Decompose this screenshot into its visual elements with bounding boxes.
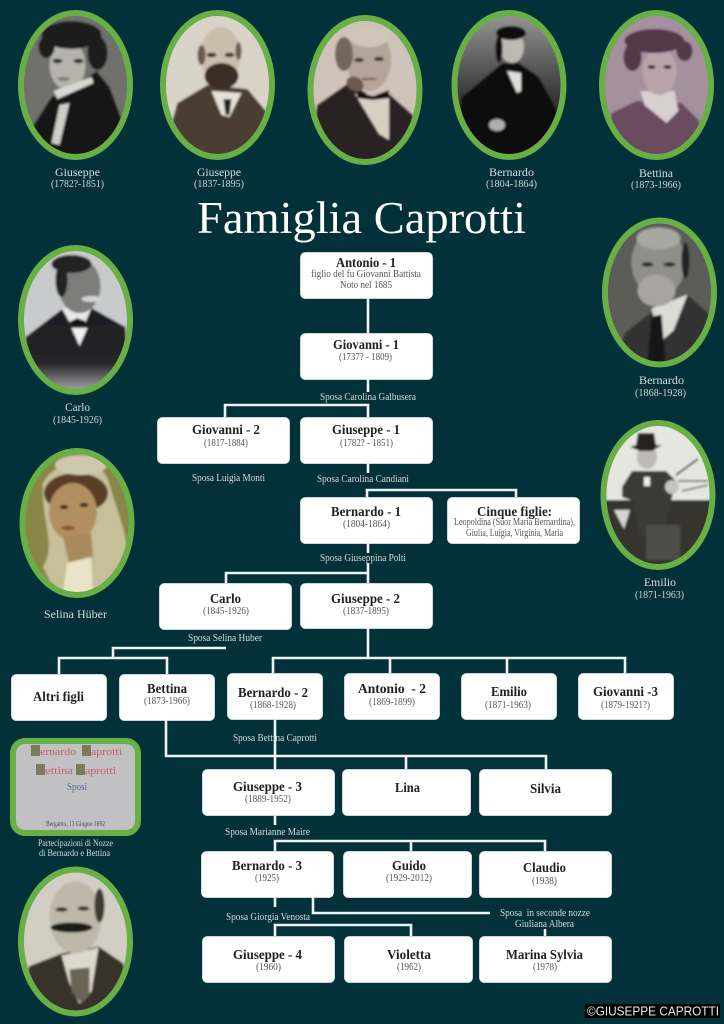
box: Giovanni 3: (1879-1921?) xyxy=(601,700,650,711)
box: Giovanni 1: Giovanni - 1 xyxy=(333,337,399,352)
wedding announcement card: aprotti xyxy=(85,765,116,777)
box: Bernardo 1: Bernardo - 1 xyxy=(331,504,401,519)
box: Carlo: Carlo xyxy=(210,591,241,606)
box: Altri figli xyxy=(12,674,106,720)
box: Bernardo 2: Bernardo - 2 xyxy=(238,685,308,700)
box: Giuseppe 4: Giuseppe - 4 xyxy=(233,947,302,962)
wedding announcement card: Sposi xyxy=(67,782,87,793)
portrait captions: Bernardo xyxy=(639,375,684,387)
portrait captions: Bernardo xyxy=(489,167,534,179)
box: Marina Sylvia: (1978) xyxy=(533,962,557,973)
label: Sposa Carolina Galbusera: Sposa Carolina Galbusera xyxy=(320,392,417,403)
box: Giovanni 2 xyxy=(158,418,290,464)
portrait: Selina Huber xyxy=(19,448,135,598)
box: Giovanni 2: (1817-1884) xyxy=(204,438,248,449)
box: Bernardo 3: Bernardo - 3 xyxy=(232,858,302,873)
card caption: Partecipazioni di Nozze xyxy=(38,838,113,848)
box: Giuseppe 4 xyxy=(202,936,334,982)
box: Violetta: Violetta xyxy=(387,947,431,962)
portrait captions: Emilio xyxy=(644,577,676,589)
portrait: Giuseppe 1782 xyxy=(18,10,134,165)
box: Altri figli: Altri figli xyxy=(33,689,84,704)
box: Antonio 2: (1869-1899) xyxy=(369,697,415,708)
portrait: Emilio xyxy=(600,420,716,570)
card caption xyxy=(38,838,113,858)
portrait: Bernardo 1804 xyxy=(451,10,567,165)
box: Silvia: Silvia xyxy=(530,781,561,796)
box: Giuseppe 2: Giuseppe - 2 xyxy=(331,591,400,606)
wedding announcement card: Bergamo, 13 Giugno 1892 xyxy=(46,819,105,828)
connector lines xyxy=(59,298,625,936)
box: Giuseppe 1: Giuseppe - 1 xyxy=(332,422,400,437)
box: Emilio xyxy=(462,674,556,720)
portrait: Giuseppe 1837 xyxy=(160,10,276,165)
portrait captions: (1873-1966) xyxy=(631,179,681,191)
box: Antonio 1: Antonio - 1 xyxy=(336,255,396,270)
label: Sposa in seconde nozze xyxy=(500,908,591,930)
box: Cinque figlie xyxy=(448,498,580,544)
wedding announcement card: aprotti xyxy=(91,746,122,758)
box: Giovanni 1 xyxy=(300,334,432,380)
box: Cinque figlie: Cinque figlie: xyxy=(477,504,552,519)
box: Giovanni 1: (1737? - 1809) xyxy=(339,352,392,363)
portrait captions xyxy=(44,167,686,621)
portrait captions: Carlo xyxy=(65,402,90,414)
box: Bernardo 1: (1804-1864) xyxy=(343,519,390,530)
label: Sposa Bettina Caprotti: Sposa Bettina Caprotti xyxy=(233,733,317,744)
box: Claudio xyxy=(480,852,612,898)
portrait captions: Giuseppe xyxy=(55,167,100,179)
box: Emilio: (1871-1963) xyxy=(485,700,531,711)
portrait: Giuseppe senior centre xyxy=(307,15,423,170)
portrait captions: (1845-1926) xyxy=(53,414,102,426)
box: Bernardo 2: (1868-1928) xyxy=(250,700,296,711)
portrait captions: Bettina xyxy=(639,168,673,180)
label: Sposa Luigia Monti: Sposa Luigia Monti xyxy=(192,473,265,484)
box: Emilio: Emilio xyxy=(491,684,527,699)
box: Lina xyxy=(342,770,470,816)
copyright badge: ©GIUSEPPE CAPROTTI xyxy=(587,1004,719,1018)
box: Marina Sylvia xyxy=(480,936,612,982)
box: Giovanni 3: Giovanni -3 xyxy=(593,684,658,699)
box: Bernardo 3: (1925) xyxy=(255,873,279,884)
wedding announcement card: ernardo xyxy=(40,746,77,758)
label: Sposa Selina Huber: Sposa Selina Huber xyxy=(188,633,263,644)
box: Giuseppe 4: (1960) xyxy=(256,962,281,973)
box: Bernardo 3 xyxy=(202,852,334,898)
portrait captions: (1837-1895) xyxy=(194,178,244,190)
box: Giovanni 2: Giovanni - 2 xyxy=(192,422,260,437)
box: Carlo: (1845-1926) xyxy=(203,606,249,617)
box: Antonio 2: Antonio - 2 xyxy=(358,681,426,696)
label: Sposa Giuseppina Polti: Sposa Giuseppina Polti xyxy=(320,553,406,564)
box: Bettina xyxy=(120,674,214,720)
box: Antonio 1: Noto nel 1685 xyxy=(340,280,392,291)
label: Sposa in seconde nozze: Giuliana Albera xyxy=(515,919,575,930)
portrait: Bernardo 1868 xyxy=(602,218,718,372)
box: Bettina: (1873-1966) xyxy=(144,696,190,707)
card caption: di Bernardo e Bettina xyxy=(39,848,110,858)
box: Antonio 1 xyxy=(300,252,432,298)
label: Sposa in seconde nozze: Sposa in seconde nozze xyxy=(500,908,591,919)
box: Marina Sylvia: Marina Sylvia xyxy=(506,947,583,962)
box: Guido: Guido xyxy=(392,858,426,873)
box: Antonio 2 xyxy=(344,674,440,720)
box: Cinque figlie: Leopoldina (Suor Maria Bernardina), xyxy=(454,517,575,528)
label: Sposa Marianne Maire: Sposa Marianne Maire xyxy=(225,827,311,838)
box: Bernardo 2 xyxy=(228,674,322,720)
box: Violetta: (1962) xyxy=(397,962,421,973)
box: Bernardo 1 xyxy=(300,498,432,544)
box: Cinque figlie: Giulia, Luigia, Virginia, Maria xyxy=(466,528,563,539)
portrait captions: Selina Hüber xyxy=(44,609,107,621)
box: Guido: (1929-2012) xyxy=(386,873,432,884)
box: Giuseppe 3: Giuseppe - 3 xyxy=(233,779,302,794)
portrait captions: (1804-1864) xyxy=(486,178,537,190)
title: Famiglia Caprotti xyxy=(197,193,526,243)
portrait: Bernardo bottom left xyxy=(18,866,134,1022)
box: Antonio 1: figlio del fu Giovanni Battista xyxy=(311,269,421,280)
box: Giuseppe 2 xyxy=(300,584,432,628)
portrait captions: (1871-1963) xyxy=(635,589,684,601)
box: Giuseppe 2: (1837-1895) xyxy=(343,606,389,617)
box: Giuseppe 3: (1889-1952) xyxy=(245,794,291,805)
portrait captions: Giuseppe xyxy=(197,167,241,179)
portrait captions: (1782?-1851) xyxy=(51,178,104,190)
box: Silvia xyxy=(480,770,612,816)
box: Violetta xyxy=(344,936,472,982)
label: Sposa Carolina Candiani: Sposa Carolina Candiani xyxy=(317,474,409,485)
box: Giovanni 3 xyxy=(578,674,674,720)
portrait: Carlo xyxy=(18,245,134,400)
box: Lina: Lina xyxy=(395,780,420,795)
box: Carlo xyxy=(160,584,292,630)
box: Giuseppe 1 xyxy=(300,418,432,464)
box: Giuseppe 3 xyxy=(202,770,334,816)
box: Claudio: (1938) xyxy=(532,876,557,887)
portrait captions: (1868-1928) xyxy=(635,387,686,399)
box: Giuseppe 1: (1782? - 1851) xyxy=(340,438,393,449)
box: Guido xyxy=(344,852,472,898)
box: Claudio: Claudio xyxy=(523,860,566,875)
wedding announcement card: ettina xyxy=(45,765,73,777)
box: Bettina: Bettina xyxy=(147,681,187,696)
wedding announcement card xyxy=(13,741,138,833)
portrait: Bettina xyxy=(598,10,714,165)
label: Sposa Giorgia Venosta: Sposa Giorgia Venosta xyxy=(226,912,311,923)
